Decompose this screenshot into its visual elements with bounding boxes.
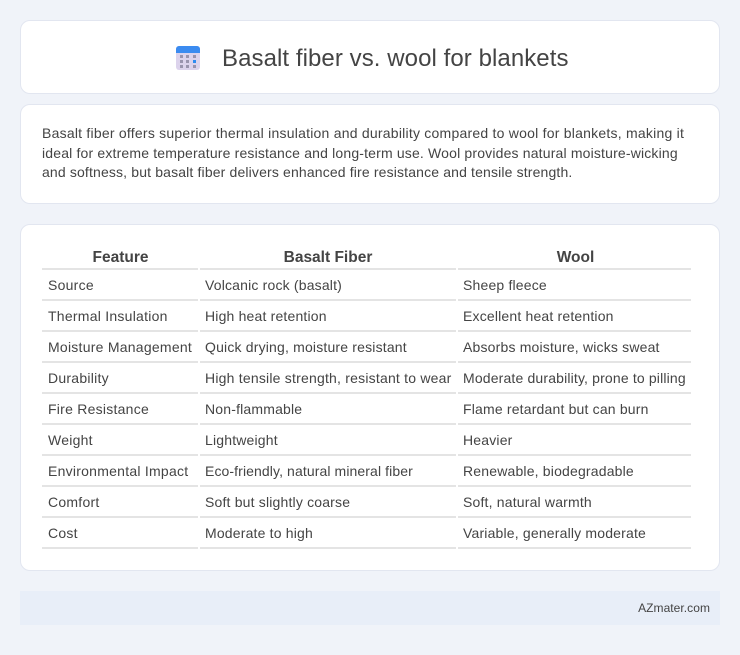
icon: calendar xyxy=(176,46,200,70)
row: Cost: Variable, generally moderate xyxy=(463,525,646,541)
row: Weight: Lightweight xyxy=(205,432,278,448)
row: Environmental Impact: Environmental Impact xyxy=(48,463,188,479)
footer text: AZmater.com xyxy=(638,601,710,615)
row: Fire Resistance xyxy=(42,401,691,425)
summary text: ideal for extreme temperature resistance and long-term use. Wool provides natural moisture-wicking xyxy=(42,145,678,161)
row: Moisture Management: Absorbs moisture, wicks sweat xyxy=(463,339,660,355)
row: Cost: Moderate to high xyxy=(205,525,313,541)
summary text xyxy=(42,125,684,180)
row: Environmental Impact: Renewable, biodegradable xyxy=(463,463,634,479)
row: Moisture Management xyxy=(42,339,691,363)
header: Basalt Fiber: Basalt Fiber xyxy=(284,249,372,266)
row: Comfort: Soft but slightly coarse xyxy=(205,494,350,510)
row: Moisture Management: Quick drying, moisture resistant xyxy=(205,339,407,355)
row: Weight: Weight xyxy=(48,432,93,448)
header: Feature: Feature xyxy=(92,249,148,266)
row: Durability xyxy=(42,370,691,394)
table xyxy=(42,249,691,270)
row: Durability: Durability xyxy=(48,370,109,386)
title panel xyxy=(20,20,720,94)
header: Wool: Wool xyxy=(557,249,594,266)
row: Weight: Heavier xyxy=(463,432,513,448)
row: Cost: Cost xyxy=(48,525,78,541)
row: Comfort: Comfort xyxy=(48,494,100,510)
title: Basalt fiber vs. wool for blankets xyxy=(222,45,569,72)
row: Source: Sheep fleece xyxy=(463,277,547,293)
row: Weight xyxy=(42,432,691,456)
row: Thermal Insulation: Excellent heat retention xyxy=(463,308,614,324)
row: Durability: High tensile strength, resistant to wear xyxy=(205,370,452,386)
row: Fire Resistance: Fire Resistance xyxy=(48,401,149,417)
row: Comfort: Soft, natural warmth xyxy=(463,494,592,510)
row: Source: Source xyxy=(48,277,94,293)
summary text: and softness, but basalt fiber delivers enhanced fire resistance and tensile strength. xyxy=(42,164,572,180)
row: Thermal Insulation xyxy=(42,308,691,332)
row: Cost xyxy=(42,525,691,549)
row: Fire Resistance: Flame retardant but can burn xyxy=(463,401,649,417)
row: Thermal Insulation: Thermal Insulation xyxy=(48,308,168,324)
footer bar xyxy=(20,591,720,625)
row: Source: Volcanic rock (basalt) xyxy=(205,277,342,293)
row: Fire Resistance: Non-flammable xyxy=(205,401,302,417)
row: Moisture Management: Moisture Management xyxy=(48,339,192,355)
table panel xyxy=(20,224,720,571)
summary text: Basalt fiber offers superior thermal insulation and durability compared to wool for blankets, making it xyxy=(42,125,684,141)
row: Environmental Impact xyxy=(42,463,691,487)
row: Source xyxy=(42,277,691,301)
row: Durability: Moderate durability, prone to pilling xyxy=(463,370,686,386)
summary panel xyxy=(20,104,720,204)
row: Thermal Insulation: High heat retention xyxy=(205,308,327,324)
row: Environmental Impact: Eco-friendly, natural mineral fiber xyxy=(205,463,413,479)
row: Comfort xyxy=(42,494,691,518)
